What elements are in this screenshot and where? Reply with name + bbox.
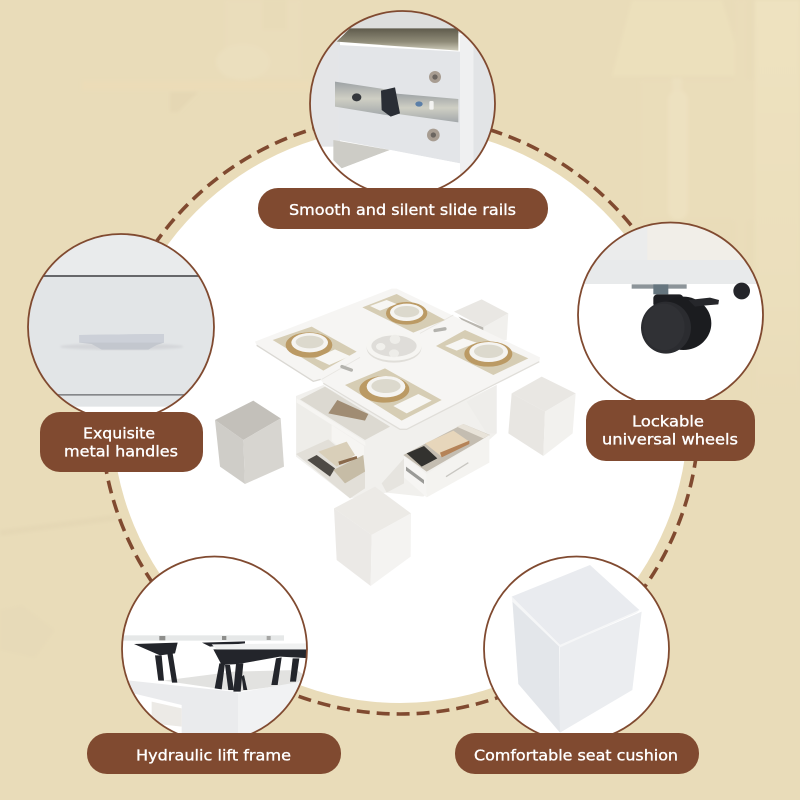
table body with shelves — [296, 385, 497, 498]
detail circle: seat cushion stool — [484, 556, 669, 742]
detail circle: metal handle — [28, 232, 214, 420]
plates — [286, 302, 512, 403]
stool: left — [215, 401, 284, 484]
detail circle: lift frame — [120, 556, 310, 750]
label: metal handles — [40, 412, 203, 472]
white centre circle — [112, 127, 688, 703]
place mats — [273, 294, 528, 421]
detail circle: caster wheel — [577, 220, 767, 408]
label: seat cushion: Comfortable seat cushion — [474, 746, 678, 764]
label: metal handles: Exquisite — [83, 424, 155, 442]
table top with place settings — [255, 289, 540, 429]
hinges — [340, 364, 353, 372]
shelf books — [307, 400, 368, 483]
label: lift frame: Hydraulic lift frame — [136, 746, 291, 764]
label: lift frame — [87, 733, 341, 774]
stool: right — [508, 377, 576, 456]
label: metal handles: metal handles — [64, 442, 178, 460]
label: slide rails: Smooth and silent slide rails — [289, 201, 516, 219]
dashed ring — [101, 116, 699, 714]
centre tray with glasses — [367, 333, 421, 363]
product: lift-top table with four stools — [215, 289, 576, 586]
label: seat cushion — [455, 733, 699, 774]
napkins — [315, 300, 477, 413]
detail circle: slide rails — [309, 10, 496, 188]
label: slide rails — [258, 188, 548, 229]
stool: back — [454, 299, 508, 342]
label: universal wheels: Lockable — [632, 412, 704, 430]
stool: front — [334, 487, 411, 586]
open drawer — [403, 424, 490, 497]
label: universal wheels: universal wheels — [602, 430, 738, 448]
label: universal wheels — [586, 400, 755, 461]
